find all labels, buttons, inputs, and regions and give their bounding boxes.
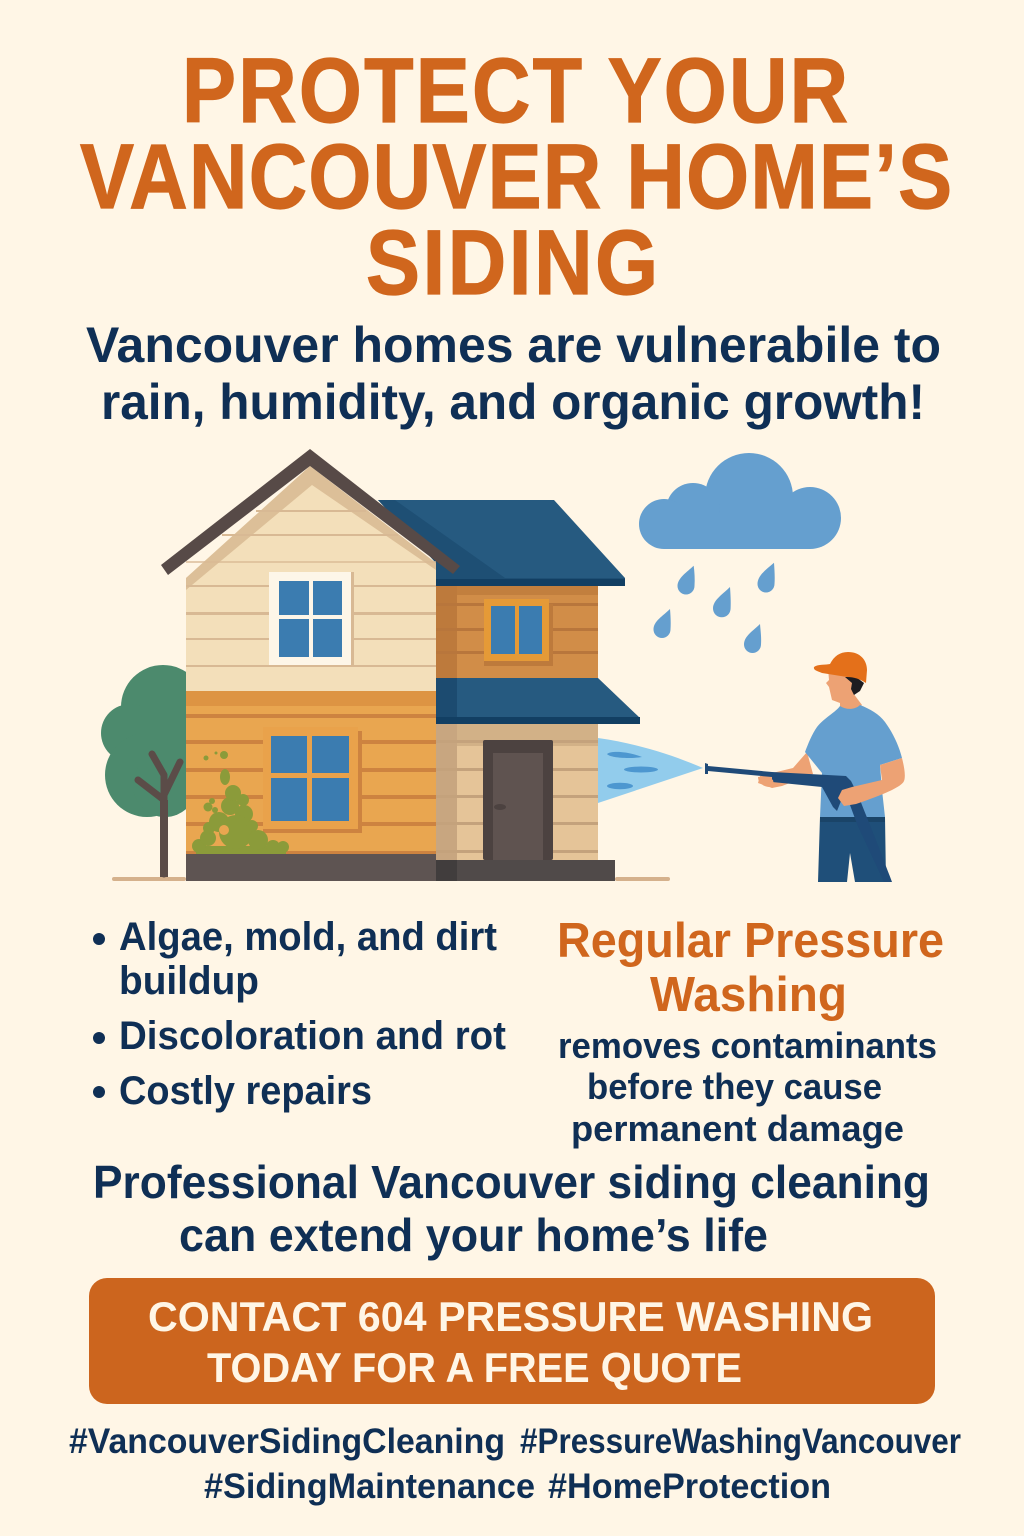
- hashtags: #SidingMaintenance: [204, 1467, 535, 1506]
- hashtags: #PressureWashingVancouver: [520, 1422, 961, 1461]
- right upper wall: [436, 586, 598, 678]
- bullet: algae: Algae, mold, and dirt: [119, 915, 497, 959]
- subtitle: [86, 317, 941, 430]
- front hand: [758, 777, 774, 787]
- door: [483, 740, 553, 860]
- worker with pressure washer: [705, 652, 905, 882]
- icon: tree: [101, 665, 186, 878]
- right lower wall: [436, 724, 598, 860]
- subtitle: rain, humidity, and organic growth!: [101, 374, 925, 430]
- bullet: algae: buildup: [119, 959, 259, 1003]
- orange lower wall: [186, 691, 436, 854]
- text: removes contaminants: permanent damage: [571, 1108, 904, 1149]
- text: removes contaminants: [558, 1025, 937, 1149]
- heading: regular pressure washing: Washing: [650, 968, 847, 1022]
- icon: moss and algae: [192, 751, 289, 854]
- subtitle: Vancouver homes are vulnerabile to: [86, 317, 941, 373]
- cream upper wall: [186, 466, 436, 691]
- bullet: algae: [93, 915, 497, 1003]
- hat: [814, 652, 867, 683]
- icon: rain cloud: [639, 453, 841, 653]
- title: SIDING: [366, 212, 658, 314]
- small orange window: [484, 599, 553, 666]
- house: [161, 449, 640, 881]
- lower window: [263, 727, 362, 833]
- call to action: TODAY FOR A FREE QUOTE: [207, 1344, 742, 1391]
- bullet: repairs: Costly repairs: [119, 1069, 372, 1113]
- porch roof: [436, 678, 640, 724]
- icon: water spray: [598, 738, 703, 803]
- neck and face: [826, 668, 862, 710]
- bullet: discoloration: Discoloration and rot: [119, 1014, 506, 1058]
- bullet list: [93, 915, 506, 1113]
- title: PROTECT YOUR: [182, 40, 848, 142]
- hashtags: [69, 1422, 961, 1506]
- near arm: [838, 758, 905, 806]
- text: removes contaminants: before they cause: [587, 1066, 882, 1107]
- heading: regular pressure washing: Regular Pressure: [557, 914, 944, 968]
- call to action: [89, 1278, 935, 1404]
- gable roof trim: [161, 449, 460, 575]
- upper window: [269, 572, 354, 666]
- blue upper roof: [378, 500, 625, 586]
- heading: regular pressure washing: [557, 914, 944, 1022]
- text: professional cleaning: [93, 1156, 930, 1261]
- shirt: [805, 705, 902, 817]
- text: professional cleaning: Professional Vancouver siding cleaning: [93, 1156, 930, 1208]
- far arm: [758, 752, 813, 788]
- ground line: [112, 877, 670, 881]
- hashtags: #VancouverSidingCleaning: [69, 1422, 505, 1461]
- title: [80, 40, 952, 314]
- hair: [845, 677, 864, 695]
- cloud: [639, 453, 841, 549]
- pants: [818, 817, 886, 882]
- hashtags: #HomeProtection: [548, 1467, 831, 1506]
- title: VANCOUVER HOME’S: [80, 126, 952, 228]
- text: removes contaminants: removes contaminants: [558, 1025, 937, 1066]
- pressure gun: [705, 763, 892, 882]
- rain drops: [654, 563, 775, 653]
- call to action: CONTACT 604 PRESSURE WASHING: [148, 1293, 873, 1340]
- foundation: [186, 854, 615, 881]
- text: professional cleaning: can extend your home’s life: [179, 1209, 768, 1261]
